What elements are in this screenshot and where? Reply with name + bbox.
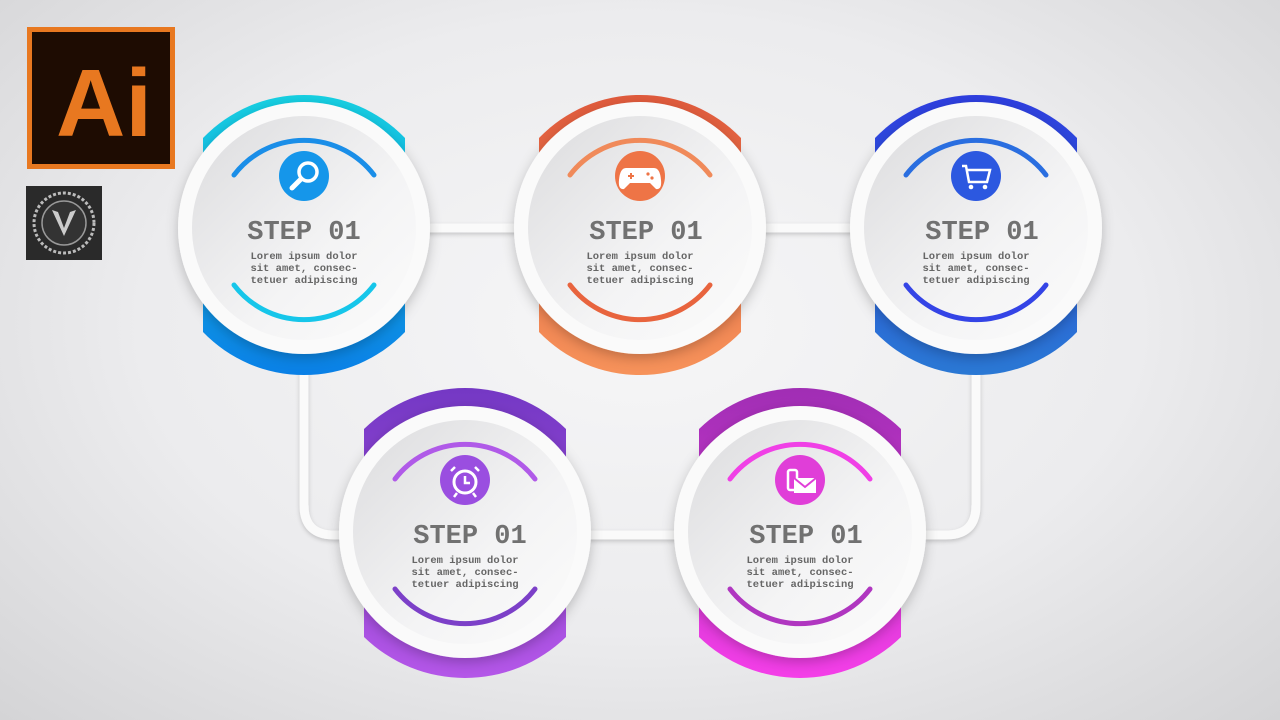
step 1: Lorem ipsum dolor [250,251,358,263]
step 5: Lorem ipsum dolor [746,555,854,567]
step 3 [850,95,1102,375]
step 1: STEP 01 [247,218,361,248]
step 3: tetuer adipiscing [922,275,1030,287]
step 1 [178,95,430,375]
step 4: STEP 01 [413,522,527,552]
logo: Adobe Illustrator: Ai [56,50,152,157]
step 2 [514,95,766,375]
step 4 [339,388,591,678]
step 5 [674,388,926,678]
icon: alarm clock [440,455,490,505]
icon: gamepad [615,151,665,201]
step 1: sit amet, consec- [250,263,358,275]
step 2: STEP 01 [589,218,703,248]
step 1: tetuer adipiscing [250,275,358,287]
icon: magnifier [279,151,329,201]
step 4: sit amet, consec- [411,567,519,579]
step 5: tetuer adipiscing [746,579,854,591]
step 3: sit amet, consec- [922,263,1030,275]
logo: emblem [26,186,102,260]
logo: Adobe Illustrator [27,27,175,169]
connectors [304,228,976,535]
step 4: Lorem ipsum dolor [411,555,519,567]
step 4: tetuer adipiscing [411,579,519,591]
step 5: sit amet, consec- [746,567,854,579]
step 5: STEP 01 [749,522,863,552]
icon: cart [951,151,1001,201]
step 3: STEP 01 [925,218,1039,248]
step 3: Lorem ipsum dolor [922,251,1030,263]
icon: mail phone [775,455,825,505]
step 2: sit amet, consec- [586,263,694,275]
step 2: Lorem ipsum dolor [586,251,694,263]
step 2: tetuer adipiscing [586,275,694,287]
